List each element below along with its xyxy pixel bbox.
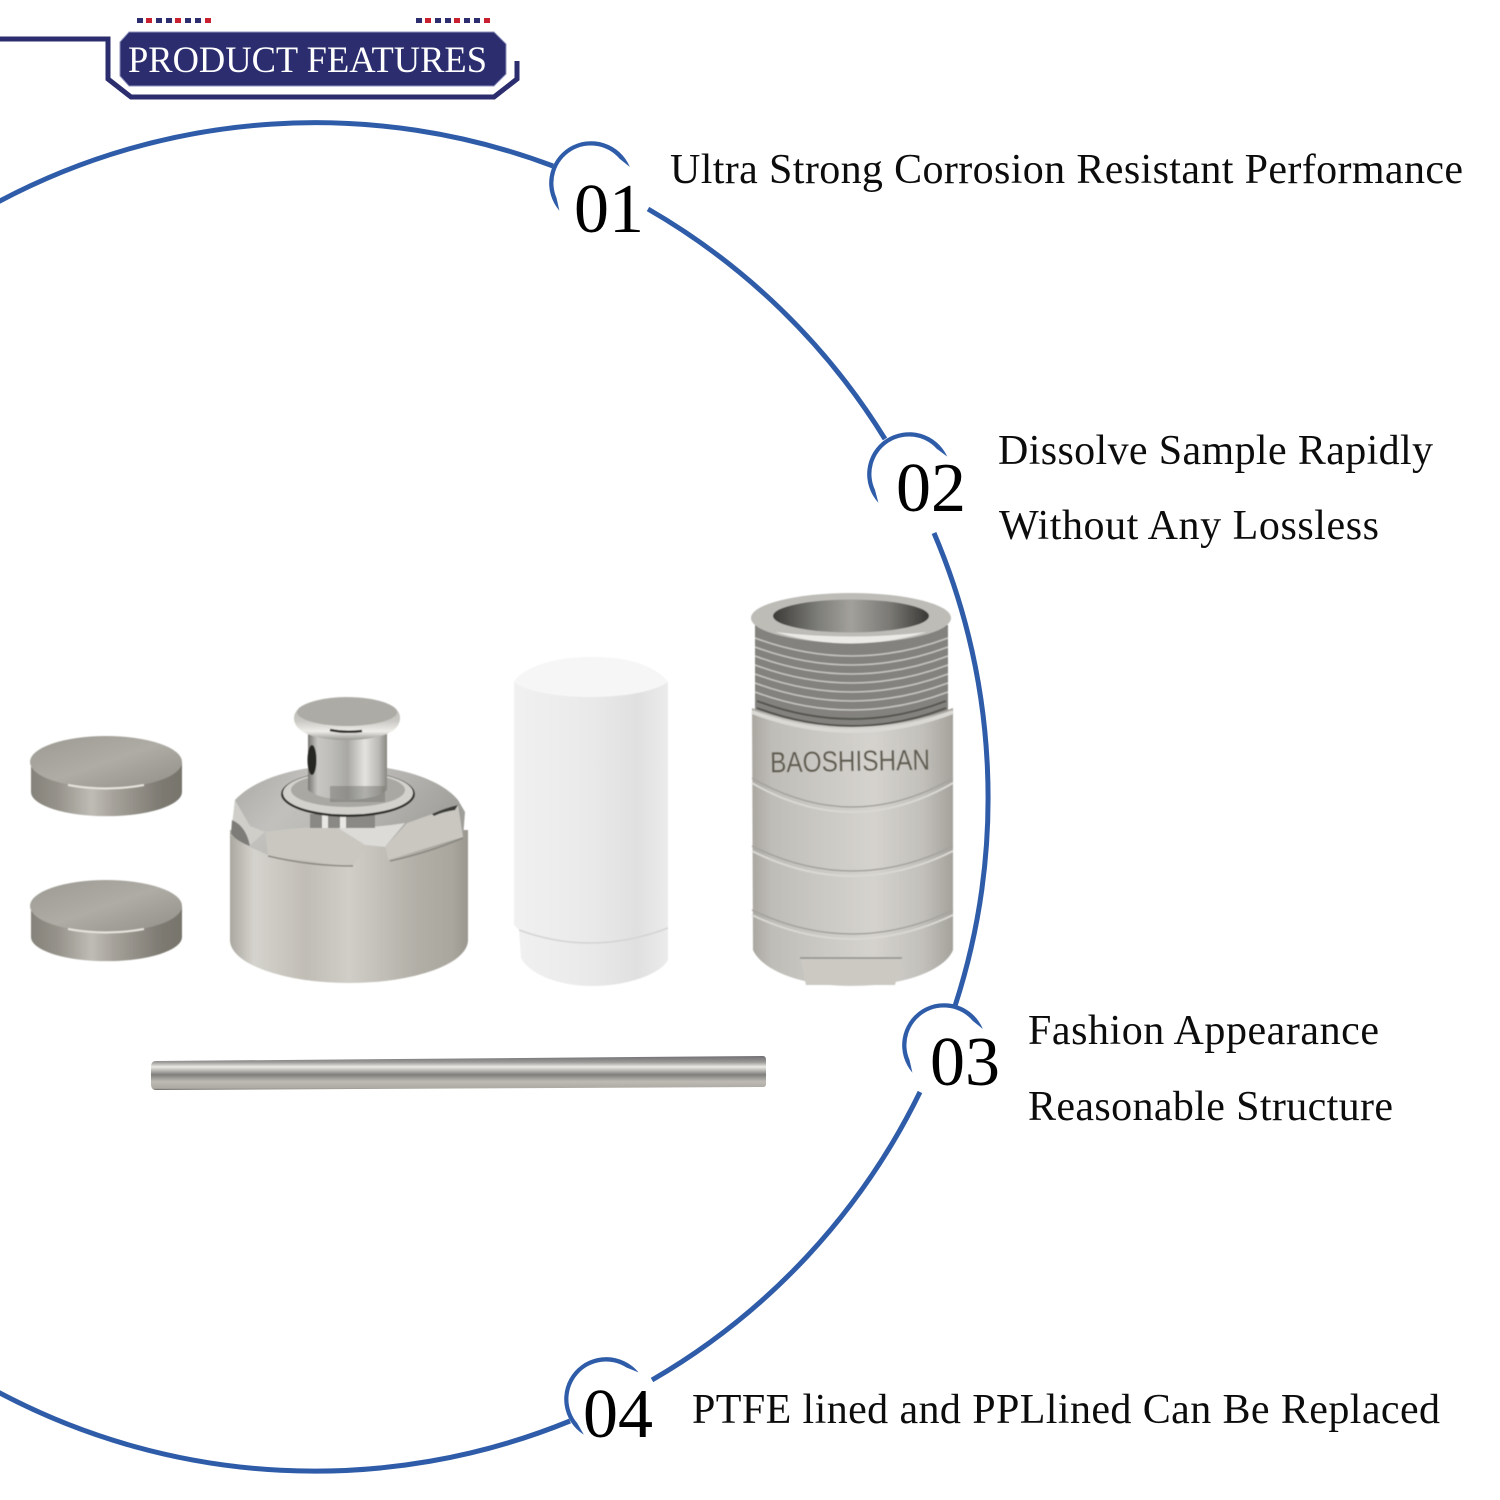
grooves <box>752 778 953 934</box>
feature text 01: Ultra Strong Corrosion Resistant Performance <box>670 147 1463 193</box>
badge arc 04 <box>554 1348 651 1438</box>
feature text 04: PTFE lined and PPLlined Can Be Replaced <box>692 1387 1440 1433</box>
thread section <box>755 625 948 730</box>
product: upper steel disc <box>30 736 182 816</box>
banner title: PRODUCT FEATURES <box>128 40 487 81</box>
product: screw cap with knob <box>230 697 468 983</box>
feature 04 <box>554 1348 1440 1453</box>
dotted accent left <box>137 18 211 23</box>
badge arc 01 <box>549 141 630 211</box>
badge arc 03 <box>902 1003 983 1073</box>
large blue circle arcs <box>0 123 988 1471</box>
feature text 03: Fashion Appearance <box>1028 1008 1379 1054</box>
product: steel rod <box>151 1056 766 1090</box>
vessel rim <box>751 593 951 643</box>
feature 03 <box>902 1003 1393 1130</box>
product: white PTFE liner <box>514 657 668 986</box>
feature text 02 <box>998 428 1433 549</box>
number 01: 01 <box>574 171 644 248</box>
feature text 03 <box>1028 1008 1393 1130</box>
banner plate <box>120 32 506 86</box>
feature text 03: Reasonable Structure <box>1028 1084 1393 1130</box>
bottom flat <box>800 958 902 985</box>
heading: product features banner <box>0 18 517 97</box>
feature text 02: Without Any Lossless <box>999 503 1379 549</box>
feature 02 <box>866 428 1433 549</box>
dotted accent right <box>416 18 490 23</box>
feature 01 <box>549 141 1463 248</box>
number 04: 04 <box>583 1376 653 1453</box>
number 02: 02 <box>896 450 966 527</box>
number 03: 03 <box>930 1024 1000 1101</box>
feature text 02: Dissolve Sample Rapidly <box>998 428 1433 474</box>
product: lower steel disc <box>30 880 182 961</box>
product: threaded steel vessel <box>751 593 953 986</box>
banner outline <box>0 39 517 97</box>
vessel body <box>752 708 953 986</box>
vessel opening <box>773 600 929 632</box>
engraved brand: BAOSHISHAN <box>770 745 930 779</box>
badge arc 02 <box>866 431 949 503</box>
